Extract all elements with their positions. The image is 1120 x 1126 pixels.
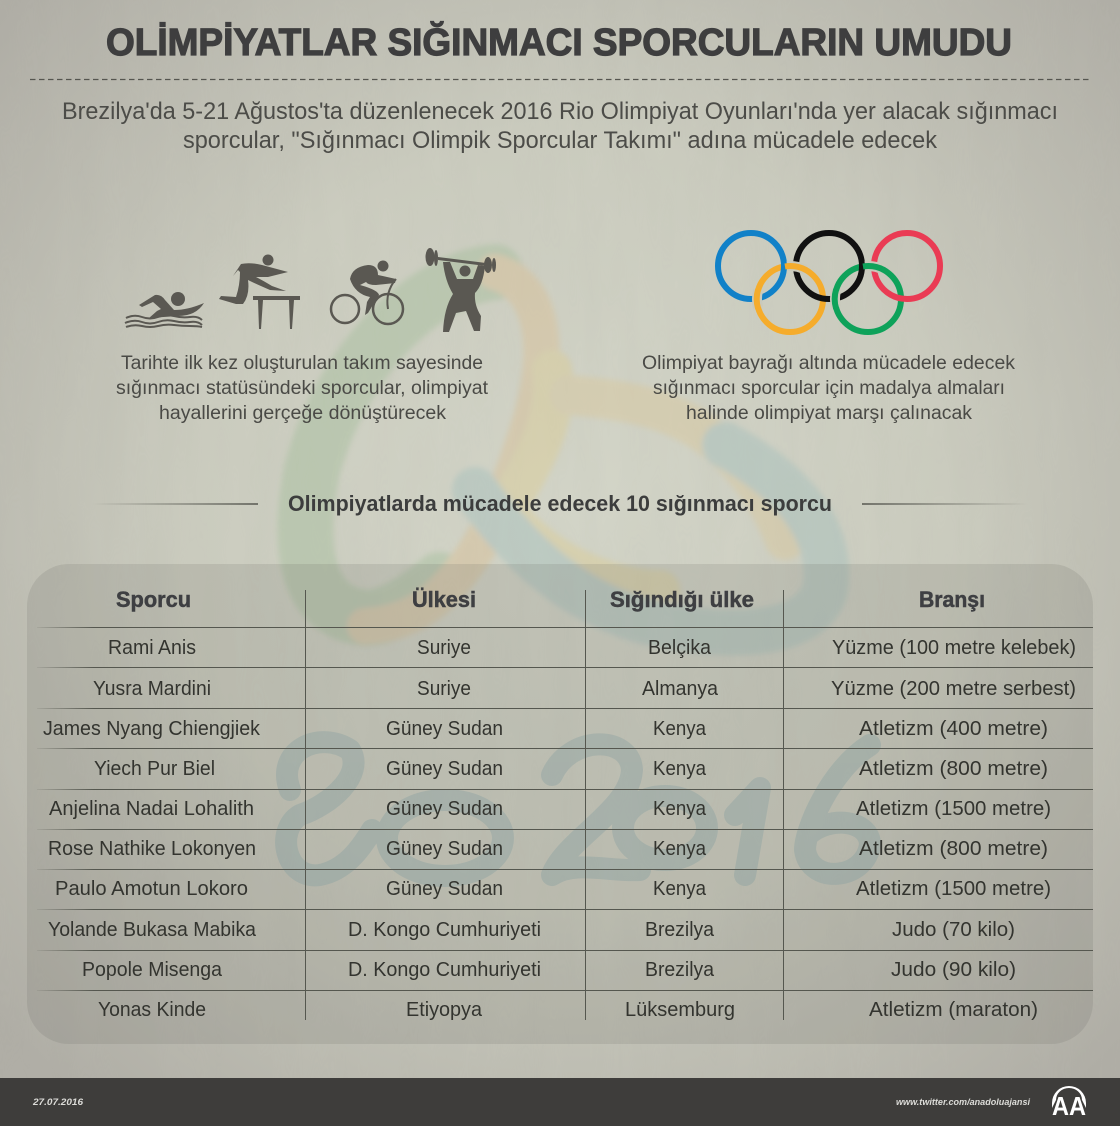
date: 27.07.2016 — [32, 1097, 84, 1108]
column: discipline: Atletizm (800 metre) — [859, 757, 1048, 780]
column: athletes: Paulo Amotun Lokoro — [55, 877, 248, 900]
watermark: rio2016 script — [286, 742, 870, 876]
right description: sığınmacı sporcular için madalya almaları — [653, 378, 1005, 399]
column: discipline — [831, 636, 1076, 1021]
left description: sığınmacı statüsündeki sporcular, olimpiyat — [116, 378, 489, 399]
icon: swimmer — [125, 292, 204, 327]
column: athletes: Yusra Mardini — [93, 677, 211, 700]
table background — [27, 564, 1093, 1044]
column: discipline: Atletizm (800 metre) — [859, 837, 1048, 860]
panel: athletes table — [27, 564, 1093, 1044]
column: athletes — [43, 636, 261, 1021]
table header row: Sporcu — [116, 587, 191, 612]
icon: Olympic rings — [718, 233, 940, 332]
column: host country: Kenya — [653, 877, 707, 900]
column: host country: Almanya — [642, 677, 719, 700]
sports icons — [125, 248, 496, 332]
column: country: D. Kongo Cumhuriyeti — [348, 918, 541, 941]
table header row — [116, 587, 985, 612]
subtitle — [62, 98, 1058, 154]
column: athletes: Yiech Pur Biel — [94, 757, 215, 780]
column: athletes: Yolande Bukasa Mabika — [48, 918, 257, 941]
column: athletes: James Nyang Chiengjiek — [43, 717, 261, 740]
icon: weightlifter — [426, 248, 496, 332]
column: host country: Lüksemburg — [625, 998, 735, 1021]
subtitle: Brezilya'da 5-21 Ağustos'ta düzenlenecek 2016 Rio Olimpiyat Oyunları'nda yer alacak sığınmacı — [62, 98, 1058, 125]
column: athletes: Anjelina Nadai Lohalith — [49, 797, 254, 820]
column: host country: Kenya — [653, 797, 707, 820]
column: athletes: Popole Misenga — [82, 958, 223, 981]
table grid lines — [37, 590, 1093, 1020]
column: host country: Belçika — [648, 636, 712, 659]
column: discipline: Yüzme (100 metre kelebek) — [832, 636, 1076, 659]
column: discipline: Judo (70 kilo) — [892, 918, 1015, 941]
title: OLİMPİYATLAR SIĞINMACI SPORCULARIN UMUDU — [106, 20, 1012, 64]
column: host country: Kenya — [653, 757, 707, 780]
column: host country: Brezilya — [645, 958, 715, 981]
column: athletes: Rose Nathike Lokonyen — [48, 837, 256, 860]
column: discipline: Atletizm (1500 metre) — [856, 797, 1051, 820]
column: country: Güney Sudan — [386, 797, 503, 820]
column: country: Güney Sudan — [386, 877, 503, 900]
column: discipline: Judo (90 kilo) — [891, 958, 1016, 981]
column: country: Güney Sudan — [386, 837, 503, 860]
right description: Olimpiyat bayrağı altında mücadele edecek — [642, 353, 1016, 374]
column: country: Güney Sudan — [386, 717, 503, 740]
twitter address: www.twitter.com/anadoluajansi — [896, 1097, 1030, 1108]
column: discipline: Yüzme (200 metre serbest) — [831, 677, 1076, 700]
column: host country — [625, 636, 735, 1021]
column: discipline: Atletizm (1500 metre) — [856, 877, 1051, 900]
watermark: Rio logo — [305, 272, 826, 632]
column: athletes: Yonas Kinde — [98, 998, 206, 1021]
column: country: D. Kongo Cumhuriyeti — [348, 958, 541, 981]
icon: cyclist — [331, 260, 403, 324]
column: host country: Brezilya — [645, 918, 715, 941]
left description: hayallerini gerçeğe dönüştürecek — [159, 403, 447, 424]
subtitle: sporcular, "Sığınmacı Olimpik Sporcular Takımı" adına mücadele edecek — [183, 127, 938, 154]
column: country: Güney Sudan — [386, 757, 503, 780]
column: discipline: Atletizm (400 metre) — [859, 717, 1048, 740]
column: athletes: Rami Anis — [108, 636, 196, 659]
table header row: Ülkesi — [412, 587, 476, 612]
icon: Anadolu Agency logo: AA — [1052, 1091, 1086, 1121]
column: host country: Kenya — [653, 717, 707, 740]
column: discipline: Atletizm (maraton) — [869, 998, 1038, 1021]
column: country: Etiyopya — [406, 998, 483, 1021]
left description — [116, 353, 489, 424]
table header row: Branşı — [919, 587, 985, 612]
footer bar — [0, 1078, 1120, 1126]
right description — [642, 353, 1016, 424]
icon: hurdler — [219, 254, 300, 329]
table heading: Olimpiyatlarda mücadele edecek 10 sığınmacı sporcu — [288, 491, 832, 516]
column: host country: Kenya — [653, 837, 707, 860]
left description: Tarihte ilk kez oluşturulan takım sayesinde — [121, 353, 483, 374]
column: country: Suriye — [417, 636, 471, 659]
column: country — [348, 636, 541, 1021]
column: country: Suriye — [417, 677, 471, 700]
right description: halinde olimpiyat marşı çalınacak — [686, 403, 973, 424]
table header row: Sığındığı ülke — [610, 587, 754, 612]
